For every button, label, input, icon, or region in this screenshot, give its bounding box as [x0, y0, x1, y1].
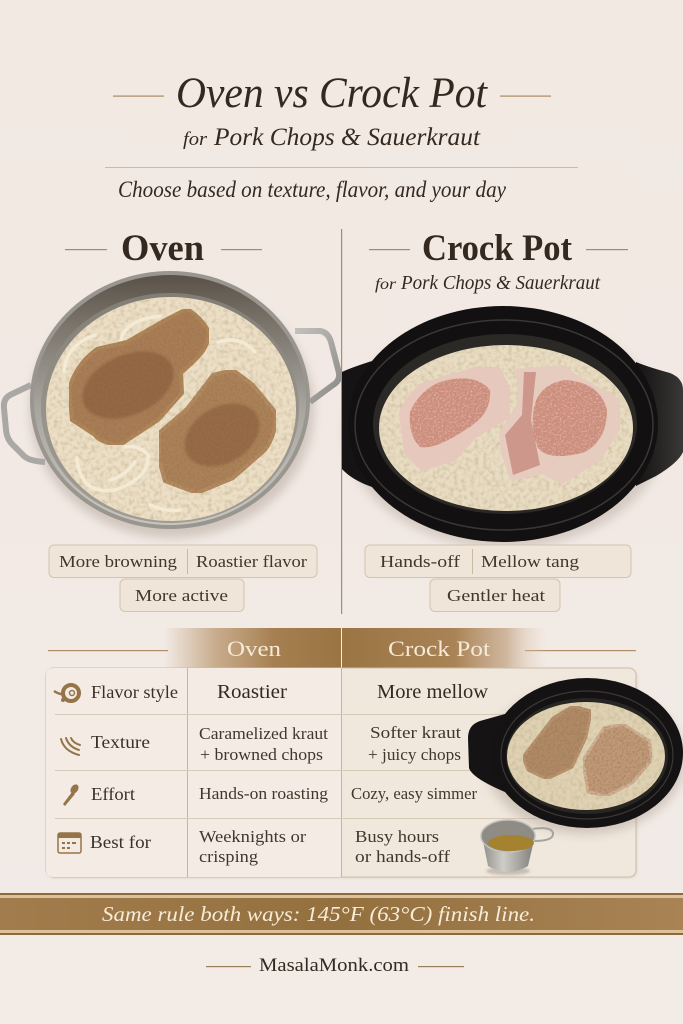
crock handles	[342, 361, 372, 487]
pill: crock traits: Mellow tang	[481, 552, 580, 571]
sear patch left	[72, 338, 184, 432]
chop right	[583, 724, 652, 796]
table header: Crock Pot	[388, 636, 490, 661]
row label: effort: Effort	[91, 784, 135, 804]
pill: gentler heat: Gentler heat	[447, 586, 545, 605]
pan body	[30, 271, 310, 529]
cell: or hands-off: or hands-off	[355, 847, 450, 866]
icon: left pan handle	[4, 385, 45, 462]
icon: right pan handle	[295, 331, 339, 402]
pork chop: browned right	[159, 370, 276, 493]
footer: MasalaMonk.com	[259, 955, 409, 976]
raw meat left	[410, 378, 490, 447]
kraut in crock	[379, 345, 633, 511]
table header	[48, 628, 636, 668]
cell: softer kraut: Softer kraut	[370, 723, 461, 742]
raw chop right	[500, 366, 619, 483]
row label: texture: Texture	[91, 732, 150, 752]
crock pot subtitle: for	[375, 276, 397, 293]
sear patch right	[173, 391, 271, 479]
cell: more mellow: More mellow	[377, 682, 488, 703]
pill: oven traits: Roastier flavor	[196, 552, 307, 571]
cell: juicy chops: + juicy chops	[368, 745, 461, 764]
sauerkraut bed	[46, 297, 296, 521]
cell: crisping: crisping	[199, 847, 259, 866]
banner: Same rule both ways: 145°F (63°C) finish line.	[102, 902, 535, 926]
icon: spoon	[63, 783, 80, 806]
cell: roastier: Roastier	[217, 682, 288, 703]
comparison table	[46, 668, 637, 878]
pill: oven traits	[49, 545, 317, 578]
cell: caramelized kraut: Caramelized kraut	[199, 724, 328, 743]
heading: oven: Oven	[121, 228, 204, 269]
pill: crock traits	[365, 545, 631, 578]
tagline: Choose based on texture, flavor, and your day	[118, 177, 507, 202]
oven pan photo	[4, 271, 339, 538]
subtitle: for	[183, 129, 208, 150]
pork chop: browned left	[69, 309, 209, 445]
pill: crock traits: Hands-off	[380, 552, 460, 571]
pill: more active	[120, 579, 244, 612]
pill: oven traits: More browning	[59, 552, 178, 571]
cell: browned chops: + browned chops	[200, 745, 323, 764]
title: Oven vs Crock Pot	[176, 70, 488, 117]
table header: Oven	[227, 636, 281, 661]
cell: busy hours: Busy hours	[355, 827, 439, 846]
raw meat right	[533, 380, 607, 456]
crock body	[348, 306, 658, 542]
cell: weeknights: Weeknights or	[199, 827, 306, 846]
kraut in small crock	[507, 702, 665, 810]
chop left	[523, 706, 591, 779]
pill: gentler heat	[430, 579, 560, 612]
cell: hands-on roasting: Hands-on roasting	[199, 784, 329, 803]
icon: calendar	[58, 833, 81, 853]
icon: flavor style	[54, 685, 79, 702]
crock pot subtitle: Pork Chops & Sauerkraut	[400, 272, 600, 294]
small crock pot photo	[468, 678, 683, 834]
icon: texture	[61, 738, 80, 755]
pill: more active: More active	[135, 586, 228, 605]
raw chop left	[400, 368, 509, 470]
cell: cozy easy simmer: Cozy, easy simmer	[351, 784, 477, 803]
crock pot photo	[342, 306, 683, 548]
onion rings	[64, 316, 255, 510]
row label: best for: Best for	[90, 832, 151, 852]
heading: crock pot: Crock Pot	[422, 228, 573, 269]
row label: flavor style: Flavor style	[91, 682, 178, 702]
subtitle: Pork Chops & Sauerkraut	[213, 124, 481, 151]
icon: sauce cup	[481, 820, 553, 875]
banner	[0, 893, 683, 935]
